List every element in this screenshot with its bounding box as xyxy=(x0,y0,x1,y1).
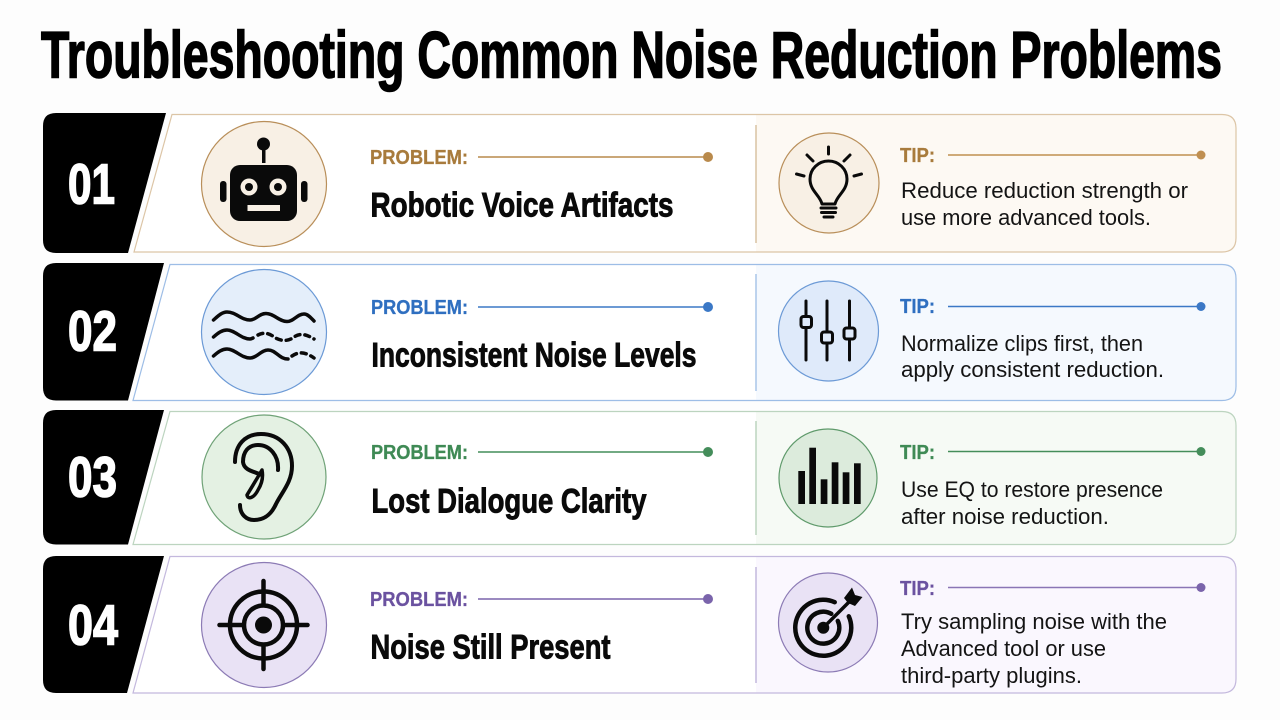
tip label: TIP: xyxy=(900,144,935,167)
number badge 02: 02 xyxy=(68,300,117,364)
number badge 01: 01 xyxy=(68,152,115,216)
tip text: apply consistent reduction. xyxy=(901,357,1164,382)
tip label: TIP: xyxy=(900,577,935,600)
row 1: robotic voice artifacts xyxy=(43,113,1236,253)
tip text: use more advanced tools. xyxy=(901,205,1151,230)
row panel outline xyxy=(133,264,1236,400)
tip panel background xyxy=(756,412,1236,544)
tip text xyxy=(901,178,1188,230)
tip panel background xyxy=(756,114,1236,252)
tip text xyxy=(901,609,1167,688)
tip label: TIP: xyxy=(900,295,935,318)
icon: equalizer bars xyxy=(779,429,877,527)
icon: sound waves xyxy=(202,270,326,394)
row panel outline xyxy=(133,412,1236,544)
number badge 03 xyxy=(43,410,164,544)
number badge 04 xyxy=(43,556,164,693)
icon: ear xyxy=(202,415,326,539)
icon: crosshair xyxy=(202,562,326,688)
problem label: PROBLEM: xyxy=(371,441,468,464)
problem heading: Noise Still Present xyxy=(370,629,611,667)
problem label xyxy=(370,588,713,611)
row panel outline xyxy=(134,114,1236,252)
tip panel background xyxy=(756,556,1236,693)
tip text: Advanced tool or use xyxy=(901,636,1106,661)
number badge 01 xyxy=(43,113,166,253)
tip panel background xyxy=(756,264,1236,400)
problem label: PROBLEM: xyxy=(371,296,468,319)
problem label xyxy=(371,441,713,464)
problem label xyxy=(371,296,713,319)
tip text: Try sampling noise with the xyxy=(901,609,1167,634)
number badge 02 xyxy=(43,263,164,400)
icon: light bulb xyxy=(779,133,879,233)
tip text: Use EQ to restore presence xyxy=(901,477,1163,502)
tip label xyxy=(900,295,1206,318)
tip text xyxy=(901,331,1164,382)
icon: sliders xyxy=(778,281,878,381)
problem heading: Lost Dialogue Clarity xyxy=(372,483,646,521)
problem label: PROBLEM: xyxy=(370,588,468,611)
row panel outline xyxy=(133,556,1236,693)
problem heading: Inconsistent Noise Levels xyxy=(372,337,696,375)
tip text: Normalize clips first, then xyxy=(901,331,1143,356)
row 4: noise still present xyxy=(43,556,1236,693)
tip text: after noise reduction. xyxy=(901,504,1109,529)
problem label xyxy=(370,146,713,169)
tip label xyxy=(900,577,1206,600)
icon: target with arrow xyxy=(778,573,878,672)
tip text: third-party plugins. xyxy=(901,663,1082,688)
row 3: lost dialogue clarity xyxy=(43,410,1236,544)
number badge 04: 04 xyxy=(68,594,118,658)
tip label xyxy=(900,144,1206,167)
tip label xyxy=(900,441,1206,464)
problem heading: Robotic Voice Artifacts xyxy=(370,187,674,225)
tip label: TIP: xyxy=(900,441,935,464)
row 2: inconsistent noise levels xyxy=(43,263,1236,400)
icon: robot xyxy=(202,122,326,246)
problem label: PROBLEM: xyxy=(370,146,468,169)
tip text: Reduce reduction strength or xyxy=(901,178,1188,203)
tip text xyxy=(901,477,1163,529)
number badge 03: 03 xyxy=(68,446,117,510)
